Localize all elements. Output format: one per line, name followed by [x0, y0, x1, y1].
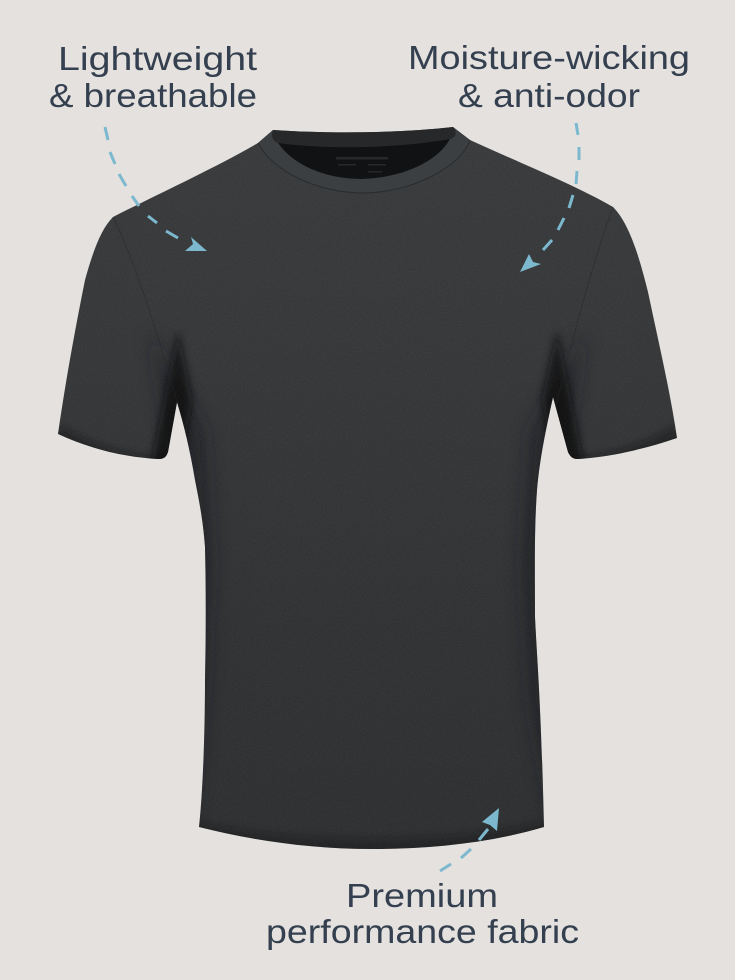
label: moisture-wicking and anti-odor: Moisture-wicking	[408, 39, 690, 76]
label: premium performance fabric: Premium	[346, 877, 498, 914]
label: moisture-wicking and anti-odor: & anti-odor	[458, 77, 640, 114]
label: moisture-wicking and anti-odor	[408, 39, 690, 114]
neck opening	[258, 127, 470, 193]
arrow: to hem	[440, 808, 499, 871]
label: lightweight and breathable	[49, 40, 257, 114]
front collar rib	[258, 127, 470, 193]
arrow: to shoulder left	[105, 127, 207, 251]
label: premium performance fabric: performance fabric	[266, 913, 579, 950]
label: lightweight and breathable: Lightweight	[58, 40, 257, 77]
shirt body and sleeves	[58, 127, 677, 849]
neck label	[336, 157, 388, 172]
back collar band	[272, 127, 456, 148]
inner neck	[278, 139, 450, 179]
label: lightweight and breathable: & breathable	[49, 77, 257, 114]
label: premium performance fabric	[266, 877, 579, 950]
arrow: to shoulder right	[520, 123, 579, 272]
t-shirt	[50, 120, 690, 860]
